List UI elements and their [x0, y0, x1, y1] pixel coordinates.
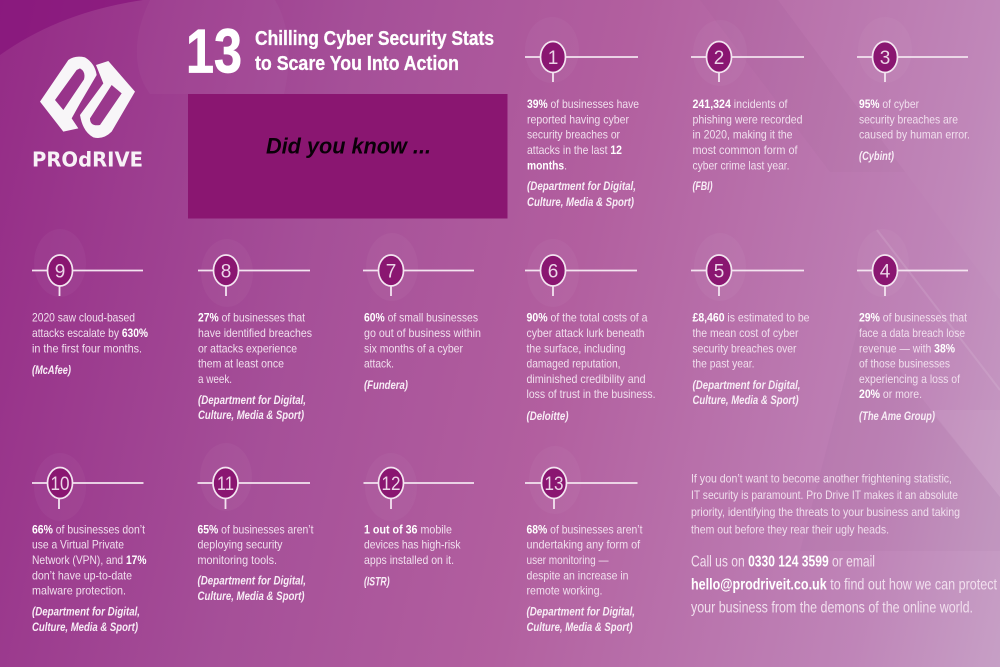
stat 4: (The Ame Group) [859, 409, 935, 423]
stat 12: devices has high-risk [364, 538, 461, 552]
stat 1: (Department for Digital, [527, 179, 636, 193]
stat 2 [691, 20, 804, 193]
stat 5: Culture, Media & Sport) [692, 393, 798, 407]
stat 1 [525, 17, 639, 209]
title number: 13 [186, 18, 242, 86]
stat 13: remote working. [526, 584, 602, 598]
stat 2: 2 [714, 48, 724, 69]
stat 11: Culture, Media & Sport) [198, 589, 304, 603]
stat 12: (ISTR) [364, 575, 390, 589]
title [186, 18, 494, 86]
stat 5: the mean cost of cyber [692, 326, 798, 340]
stat 11 [198, 443, 314, 603]
stat 2: most common form of [692, 143, 798, 157]
stat 9: 2020 saw cloud-based [32, 310, 135, 324]
stat 5 [691, 233, 810, 407]
stat 7: 7 [386, 262, 396, 282]
stat 10: don’t have up-to-date [32, 568, 132, 582]
stat 2: (FBI) [692, 179, 712, 193]
panel: did you know: Did you know ... [266, 133, 431, 158]
stat 9: attacks escalate by 630% [32, 326, 148, 340]
stat 8: have identified breaches [198, 326, 312, 340]
stat 13: Culture, Media & Sport) [526, 620, 632, 634]
stat 7: go out of business within [364, 326, 481, 340]
stat 13 [525, 446, 643, 634]
stat 3: caused by human error. [859, 128, 970, 142]
stat 4: 29% of businesses that [859, 310, 968, 324]
closing text: them out before they rear their ugly heads. [691, 522, 889, 536]
stat 2: 241,324 incidents of [692, 97, 788, 111]
stat 8: Culture, Media & Sport) [198, 408, 304, 422]
stat 8: or attacks experience [198, 341, 297, 355]
stat 3: security breaches are [859, 112, 958, 126]
title text [255, 28, 494, 75]
stat 8: them at least once [198, 357, 284, 371]
stat 13: 13 [544, 474, 564, 495]
stat 12 [364, 453, 474, 589]
stat 6: loss of trust in the business. [526, 387, 656, 401]
stat 1: attacks in the last 12 [527, 143, 622, 157]
stat 11: monitoring tools. [198, 553, 277, 567]
closing text: If you don’t want to become another frightening statistic, [691, 471, 952, 485]
stat 6: the surface, including [526, 341, 626, 355]
stat 2: phishing were recorded [692, 112, 802, 126]
stat 8 [198, 239, 312, 422]
stat 7: (Fundera) [364, 378, 408, 392]
stat 4: revenue — with 38% [859, 341, 955, 355]
stat 4: experiencing a loss of [859, 372, 961, 386]
stat 6: cyber attack lurk beneath [526, 326, 644, 340]
stat 13: user monitoring — [526, 553, 608, 567]
stat 6 [525, 239, 656, 423]
call to action [691, 554, 997, 616]
stat 10: use a Virtual Private [32, 538, 124, 552]
stat 6: diminished credibility and [526, 372, 646, 386]
stat 2: cyber crime last year. [692, 158, 790, 172]
stat 9: (McAfee) [32, 363, 71, 377]
stat 10: (Department for Digital, [32, 605, 140, 619]
stat 5: the past year. [692, 357, 754, 371]
title text: to Scare You Into Action [255, 53, 459, 75]
stat 3: (Cybint) [859, 149, 894, 163]
stat 12: 1 out of 36 mobile [364, 522, 452, 536]
stat 1: months. [527, 158, 567, 172]
stat 6: 90% of the total costs of a [526, 310, 648, 324]
stat 7: six months of a cyber [364, 341, 463, 355]
call to action: Call us on 0330 124 3599 or email [691, 554, 875, 570]
stat 11: deploying security [198, 538, 282, 552]
stat 7: attack. [364, 357, 394, 371]
stat 1: Culture, Media & Sport) [527, 195, 634, 209]
closing text [691, 471, 960, 536]
stat 11: 11 [217, 474, 234, 495]
closing text: priority, identifying the threats to your business and taking [691, 505, 960, 519]
stat 6: damaged reputation, [526, 357, 620, 371]
stat 13: (Department for Digital, [526, 605, 635, 619]
stat 10: 10 [50, 474, 70, 495]
stat 10: Culture, Media & Sport) [32, 620, 138, 634]
stat 1: 1 [548, 48, 558, 69]
stat 4: face a data breach lose [859, 326, 965, 340]
stat 1: security breaches or [527, 128, 620, 142]
stat 3: 3 [880, 48, 890, 69]
stat 10: malware protection. [32, 584, 126, 598]
stat 10: 66% of businesses don’t [32, 522, 146, 536]
stat 5: £8,460 is estimated to be [692, 310, 810, 324]
stat 12: 12 [382, 474, 400, 495]
stat 11: (Department for Digital, [198, 574, 306, 588]
stat 7: 60% of small businesses [364, 310, 478, 324]
stat 1: 39% of businesses have [527, 97, 639, 111]
stat 4: 4 [880, 262, 891, 282]
stat 2: in 2020, making it the [692, 128, 793, 142]
stat 5: 5 [714, 262, 724, 282]
stat 6: 6 [548, 262, 558, 282]
logo: Pro Drive [32, 57, 143, 171]
stat 9: 9 [55, 262, 65, 282]
stat 4 [857, 229, 968, 423]
stat 6: (Deloitte) [526, 409, 568, 423]
stat 8: a week. [198, 372, 232, 386]
stat 10: Network (VPN), and 17% [32, 553, 147, 567]
stat 12: apps installed on it. [364, 553, 454, 567]
stat 8: 8 [221, 262, 231, 282]
closing text: IT security is paramount. Pro Drive IT makes it an absolute [691, 488, 958, 502]
stat 5: security breaches over [692, 341, 796, 355]
stat 9: in the first four months. [32, 341, 142, 355]
stat 10 [32, 453, 147, 634]
icon: logo mark [40, 57, 135, 138]
stat 13: undertaking any form of [526, 538, 641, 552]
logo wordmark: PROdRIVE [32, 148, 143, 172]
stat 11: 65% of businesses aren’t [198, 522, 314, 536]
stat 4: 20% or more. [859, 387, 922, 401]
panel: did you know [188, 94, 508, 218]
stat 3: 95% of cyber [859, 97, 919, 111]
stat 8: (Department for Digital, [198, 393, 306, 407]
stat 5: (Department for Digital, [692, 378, 800, 392]
stat 1: reported having cyber [527, 112, 629, 126]
stat 9 [32, 229, 148, 377]
stat 7 [363, 233, 481, 392]
title text: Chilling Cyber Security Stats [255, 28, 494, 50]
stat 13: 68% of businesses aren’t [526, 522, 643, 536]
stat 4: of those businesses [859, 357, 950, 371]
stat 13: despite an increase in [526, 568, 628, 582]
stat 3 [857, 17, 970, 163]
stat 8: 27% of businesses that [198, 310, 306, 324]
